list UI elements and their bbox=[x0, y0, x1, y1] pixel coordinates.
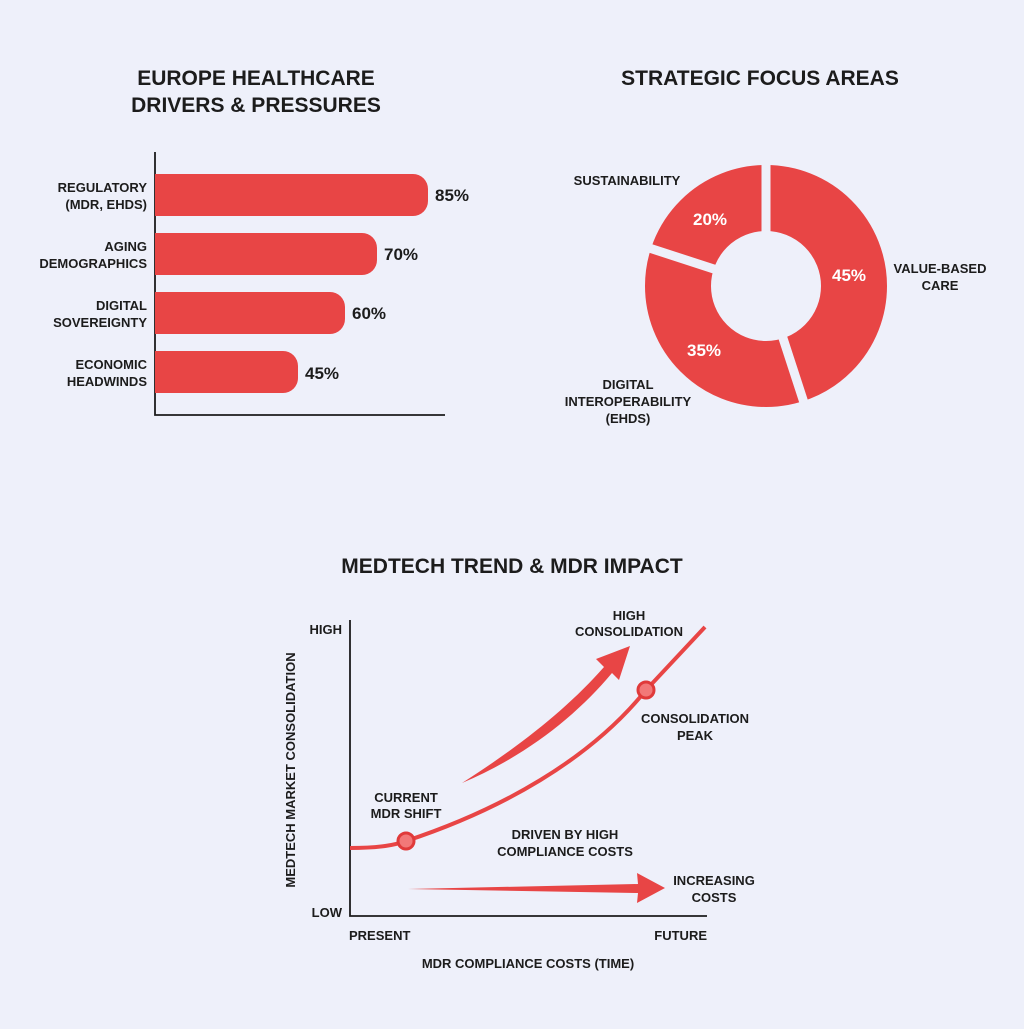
donut chart: CARE bbox=[922, 278, 959, 293]
line chart: consolidation: INCREASING bbox=[673, 873, 755, 888]
bar: aging bbox=[39, 233, 418, 275]
bar: digital sovereignty: DIGITAL bbox=[96, 298, 147, 313]
bar: digital sovereignty: SOVEREIGNTY bbox=[53, 315, 147, 330]
line chart: consolidation: COSTS bbox=[692, 890, 737, 905]
bar: regulatory bbox=[58, 174, 469, 216]
title: medtech trend: MEDTECH TREND & MDR IMPACT bbox=[341, 555, 683, 578]
bar: aging: DEMOGRAPHICS bbox=[39, 256, 147, 271]
line chart: consolidation: HIGH bbox=[310, 622, 342, 637]
title: strategic focus: STRATEGIC FOCUS AREAS bbox=[621, 67, 899, 90]
line chart: consolidation: COMPLIANCE COSTS bbox=[497, 844, 633, 859]
line chart: consolidation bbox=[283, 608, 755, 971]
line chart: consolidation: MDR SHIFT bbox=[371, 806, 441, 821]
bar chart: drivers bbox=[39, 152, 469, 415]
title: drivers & pressures: DRIVERS & PRESSURES bbox=[131, 94, 381, 117]
title: drivers & pressures: EUROPE HEALTHCARE bbox=[137, 67, 375, 90]
donut chart: (EHDS) bbox=[606, 411, 650, 426]
bar: economic: HEADWINDS bbox=[67, 374, 147, 389]
bar: aging: AGING bbox=[104, 239, 147, 254]
line chart: consolidation: HIGH bbox=[613, 608, 645, 623]
bar: digital sovereignty: 60% bbox=[352, 304, 386, 323]
donut chart: SUSTAINABILITY bbox=[574, 173, 681, 188]
line chart: consolidation: PRESENT bbox=[349, 928, 410, 943]
bar: regulatory: (MDR, EHDS) bbox=[65, 197, 147, 212]
donut chart: VALUE-BASED bbox=[894, 261, 986, 276]
line chart: consolidation: CONSOLIDATION bbox=[641, 711, 749, 726]
title: drivers & pressures bbox=[131, 67, 381, 117]
bar: regulatory: REGULATORY bbox=[58, 180, 147, 195]
donut chart bbox=[565, 150, 986, 426]
bar: economic: 45% bbox=[305, 364, 339, 383]
curve bbox=[350, 627, 705, 848]
bar: aging: 70% bbox=[384, 245, 418, 264]
bar: digital sovereignty bbox=[53, 292, 386, 334]
line chart: consolidation: LOW bbox=[312, 905, 343, 920]
donut chart: 35% bbox=[687, 341, 721, 360]
donut chart: 45% bbox=[832, 266, 866, 285]
donut chart: INTEROPERABILITY bbox=[565, 394, 692, 409]
line chart: consolidation: DRIVEN BY HIGH bbox=[512, 827, 618, 842]
bar: economic bbox=[67, 351, 339, 393]
arrow: increasing costs bbox=[408, 873, 665, 903]
line chart: consolidation: FUTURE bbox=[654, 928, 707, 943]
line chart: consolidation: CURRENT bbox=[374, 790, 438, 805]
bar: economic: ECONOMIC bbox=[76, 357, 148, 372]
donut chart: DIGITAL bbox=[602, 377, 654, 392]
donut chart: 20% bbox=[693, 210, 727, 229]
line chart: consolidation: CONSOLIDATION bbox=[575, 624, 683, 639]
bar: regulatory: 85% bbox=[435, 186, 469, 205]
line chart: consolidation: MDR COMPLIANCE COSTS (TIME) bbox=[422, 956, 634, 971]
arrow: high consolidation bbox=[462, 646, 630, 783]
line chart: consolidation: MEDTECH MARKET CONSOLIDATION bbox=[283, 652, 298, 888]
line chart: consolidation: PEAK bbox=[677, 728, 714, 743]
